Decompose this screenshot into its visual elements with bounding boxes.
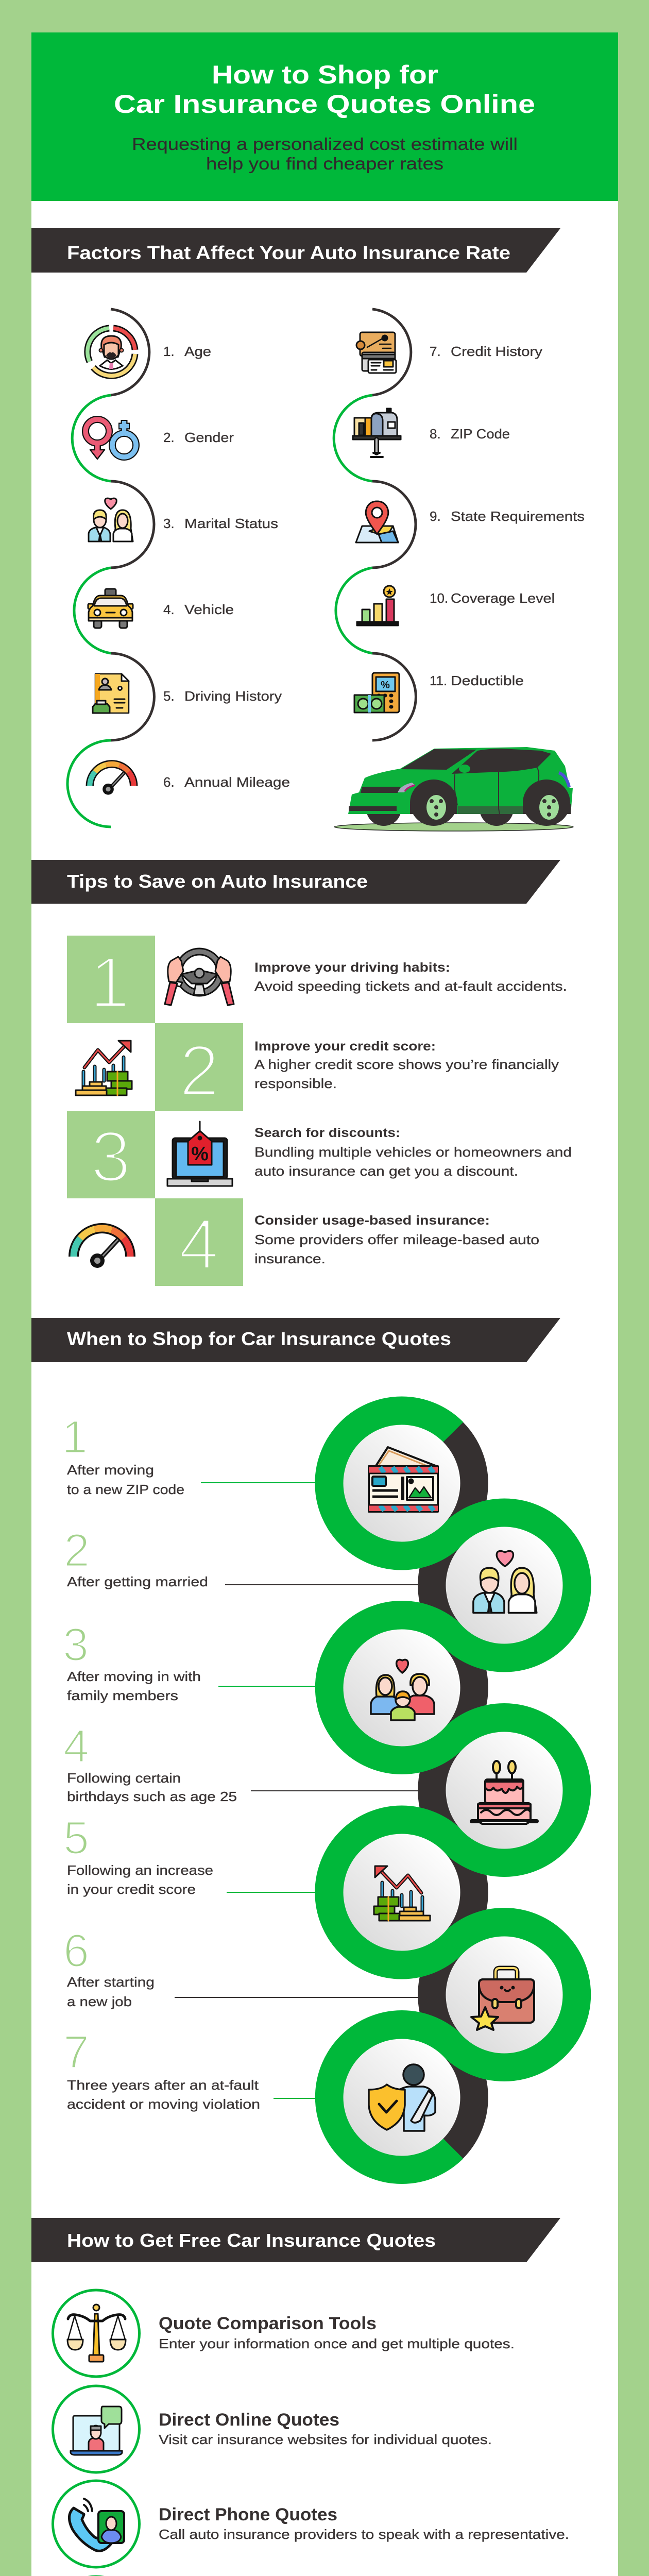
step 3: After moving in with <box>67 1669 201 1684</box>
subtitle: Requesting a personalized cost estimate will <box>132 134 518 154</box>
section heading: when: When to Shop for Car Insurance Quotes <box>67 1328 451 1349</box>
icon: driving history document <box>93 674 129 713</box>
label: 6. Annual Mileage: Annual Mileage <box>184 774 290 790</box>
label: 4. Vehicle <box>163 602 234 617</box>
tip 1 number tile: 1 <box>90 942 130 1023</box>
icon: zip code mailbox <box>353 409 401 457</box>
icon: shield and injured man <box>369 2064 435 2131</box>
text: direct phone quotes: Direct Phone Quotes <box>159 2505 337 2524</box>
icon: laptop discount tag <box>167 1122 232 1186</box>
icon: age <box>88 328 135 376</box>
label: 7. Credit History: 7. <box>430 344 441 359</box>
tip 4 number tile: 4 <box>179 1204 219 1284</box>
label: 1. Age <box>163 344 211 359</box>
icon: falling-then-rising chart <box>374 1866 430 1921</box>
icon: couple <box>473 1551 537 1613</box>
tip 2 text <box>254 1039 559 1091</box>
label: 4. Vehicle: 4. <box>163 602 175 617</box>
step 3: 3 <box>63 1619 89 1671</box>
step 4: 4 <box>63 1721 89 1772</box>
tip 3 text: auto insurance can get you a discount. <box>254 1163 518 1179</box>
step 1: to a new ZIP code <box>67 1482 184 1497</box>
icon: deductible calculator and cash <box>354 673 399 713</box>
text: quote comparison tools: Enter your information once and get multiple quotes. <box>159 2336 515 2351</box>
label: 3. Marital Status: 3. <box>163 516 175 531</box>
text: direct phone quotes <box>159 2505 569 2542</box>
section heading: how: How to Get Free Car Insurance Quotes <box>67 2230 436 2251</box>
label: 10. Coverage Level: 10. <box>430 590 448 606</box>
label: 2. Gender <box>163 430 234 445</box>
ribbon: green s-curve <box>329 1411 577 2170</box>
subtitle <box>132 134 518 173</box>
section heading: factors: Factors That Affect Your Auto Insurance Rate <box>67 242 510 263</box>
inner discs <box>343 1425 562 2156</box>
label: 7. Credit History: Credit History <box>451 344 542 359</box>
step 1: 1 <box>62 1412 88 1463</box>
tip 4 text: Consider usage-based insurance: <box>254 1213 490 1228</box>
step 3 <box>63 1619 201 1703</box>
icon: credit history cards <box>356 332 396 373</box>
step 6: 6 <box>63 1925 89 1977</box>
section heading: tips <box>31 860 560 904</box>
tip 2 text: responsible. <box>254 1076 337 1091</box>
icon: usage-based gauge <box>74 1228 130 1268</box>
tip 4 text: Some providers offer mileage-based auto <box>254 1232 539 1247</box>
label: 9. State Requirements: 9. <box>430 509 441 524</box>
tip 2 number tile: 2 <box>179 1030 219 1111</box>
label: 4. Vehicle: Vehicle <box>184 602 234 617</box>
tip 4 text <box>254 1213 539 1266</box>
step 1 <box>62 1412 184 1497</box>
section heading: factors <box>31 228 560 273</box>
tip 4 text: insurance. <box>254 1251 326 1266</box>
step 6: After starting <box>67 1974 155 1990</box>
step 1: After moving <box>67 1462 154 1478</box>
step 7: 7 <box>63 2027 89 2078</box>
icon: gender <box>86 419 136 459</box>
section heading: when <box>31 1318 560 1362</box>
icon: annual mileage gauge <box>90 764 134 795</box>
label: 8. ZIP Code: 8. <box>430 426 441 442</box>
label: 11. Deductible: 11. <box>430 673 447 688</box>
icon: birthday cake <box>472 1761 537 1824</box>
tip 3 text: Search for discounts: <box>254 1126 400 1140</box>
section heading: tips: Tips to Save on Auto Insurance <box>67 871 368 892</box>
icon: vehicle taxi <box>88 589 133 628</box>
icon: state requirements map pin <box>356 501 398 543</box>
tip 3 text: Bundling multiple vehicles or homeowners and <box>254 1144 572 1160</box>
subtitle: help you find cheaper rates <box>206 154 443 173</box>
step 7 <box>63 2027 260 2112</box>
label: 11. Deductible <box>430 673 524 688</box>
icon: direct online laptop <box>53 2386 139 2472</box>
tip 3 number tile <box>67 1111 155 1198</box>
tip 1 number tile <box>67 936 155 1023</box>
section heading: how <box>31 2218 560 2262</box>
label: 8. ZIP Code: ZIP Code <box>451 426 510 442</box>
label: 2. Gender: Gender <box>184 430 234 445</box>
tip 1 text: Improve your driving habits: <box>254 960 450 975</box>
icon: family <box>371 1659 434 1720</box>
step 5: in your credit score <box>67 1882 196 1897</box>
tip 1 text <box>254 960 567 994</box>
step 2 <box>64 1525 208 1589</box>
step 7: Three years after an at-fault <box>67 2077 259 2093</box>
step 4: Following certain <box>67 1770 181 1786</box>
step 4 <box>63 1721 237 1804</box>
text: direct online quotes: Visit car insurance websites for individual quotes. <box>159 2432 492 2447</box>
tip 2 number tile <box>155 1023 243 1111</box>
connector lines <box>175 1483 422 2098</box>
tip 1 text: Avoid speeding tickets and at-fault accidents. <box>254 978 567 994</box>
tip 4 number tile <box>155 1198 243 1286</box>
step 2: After getting married <box>67 1574 208 1589</box>
icon: coverage level bars <box>357 586 398 625</box>
label: 9. State Requirements: State Requirements <box>451 509 585 524</box>
step 7: accident or moving violation <box>67 2096 260 2112</box>
label: 2. Gender: 2. <box>163 430 175 445</box>
tip 3 text <box>254 1126 572 1179</box>
step 5: 5 <box>63 1812 89 1864</box>
label: 10. Coverage Level: Coverage Level <box>451 590 555 606</box>
icon: briefcase with star <box>471 1968 534 2030</box>
icon: laptop discount tag: % <box>191 1143 209 1165</box>
right wavy connector <box>334 309 416 740</box>
icon: direct phone <box>53 2481 139 2567</box>
label: 1. Age: 1. <box>163 344 175 359</box>
text: quote comparison tools <box>159 2314 515 2351</box>
step 5 <box>63 1812 213 1897</box>
step 5: Following an increase <box>67 1862 213 1878</box>
tip 3 number tile: 3 <box>91 1116 131 1197</box>
label: 11. Deductible: Deductible <box>451 673 524 688</box>
title: How to Shop for <box>212 60 438 89</box>
label: 5. Driving History: 5. <box>163 688 175 704</box>
label: 5. Driving History: Driving History <box>184 688 282 704</box>
tip 2 text: Improve your credit score: <box>254 1039 436 1054</box>
label: 3. Marital Status: Marital Status <box>184 516 278 531</box>
text: direct online quotes: Direct Online Quotes <box>159 2410 339 2430</box>
tip 2 text: A higher credit score shows you’re financially <box>254 1057 559 1072</box>
text: direct online quotes <box>159 2410 492 2447</box>
title <box>114 60 535 118</box>
left wavy connector <box>67 309 154 827</box>
text: direct phone quotes: Call auto insurance providers to speak with a representative. <box>159 2527 569 2542</box>
text: quote comparison tools: Quote Comparison Tools <box>159 2314 377 2333</box>
title: Car Insurance Quotes Online <box>114 90 535 118</box>
step 2: 2 <box>64 1525 90 1577</box>
icon: marital status couple <box>89 498 133 541</box>
step 3: family members <box>67 1688 178 1703</box>
icon: deductible calculator and cash: % <box>381 680 390 691</box>
label: 1. Age: Age <box>184 344 211 359</box>
label: 6. Annual Mileage: 6. <box>163 774 175 790</box>
step 6: a new job <box>67 1994 132 2009</box>
step 4: birthdays such as age 25 <box>67 1789 237 1804</box>
ribbon: dark inner arcs <box>432 1432 474 2148</box>
icon: comparison scales <box>53 2290 139 2377</box>
icon: credit score chart <box>76 1041 132 1095</box>
icon: steering wheel <box>165 952 234 1005</box>
step 6 <box>63 1925 155 2009</box>
illustration: green car <box>334 747 573 831</box>
header banner <box>31 32 618 201</box>
icon: postcard <box>369 1447 438 1512</box>
